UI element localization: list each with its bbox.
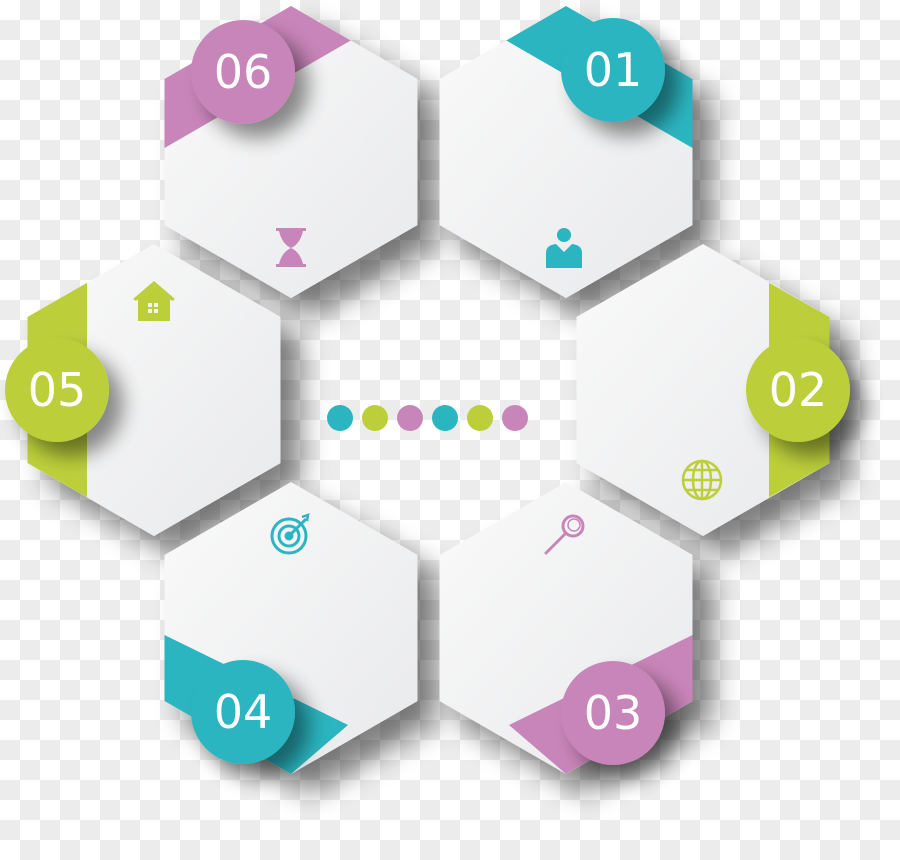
icon: house [133,281,175,321]
icon: hourglass [276,228,306,267]
badge 05: 05 [28,363,86,417]
badge 03: 03 [584,686,642,740]
badge 05 [5,338,109,442]
badge 01 [561,18,665,122]
badge 06 [191,20,295,124]
panel: hexagon 01 [440,6,692,298]
badge 03 [561,661,665,765]
icon: target [272,515,308,553]
badge 04 [191,660,295,764]
badge 02: 02 [769,363,827,417]
icon: person [546,228,582,268]
dots row [327,405,528,431]
badge 01: 01 [584,43,642,97]
badge 02 [746,338,850,442]
panel: hexagon 03 [440,482,692,774]
badge 04: 04 [214,685,272,739]
panel: hexagon 06 [164,6,418,298]
panel: hexagon 05 [5,244,280,536]
panel: hexagon 02 [576,244,850,536]
icon: magnifier [546,516,583,553]
badge 06: 06 [214,45,272,99]
icon: globe [683,461,721,499]
panel: hexagon 04 [164,482,418,774]
